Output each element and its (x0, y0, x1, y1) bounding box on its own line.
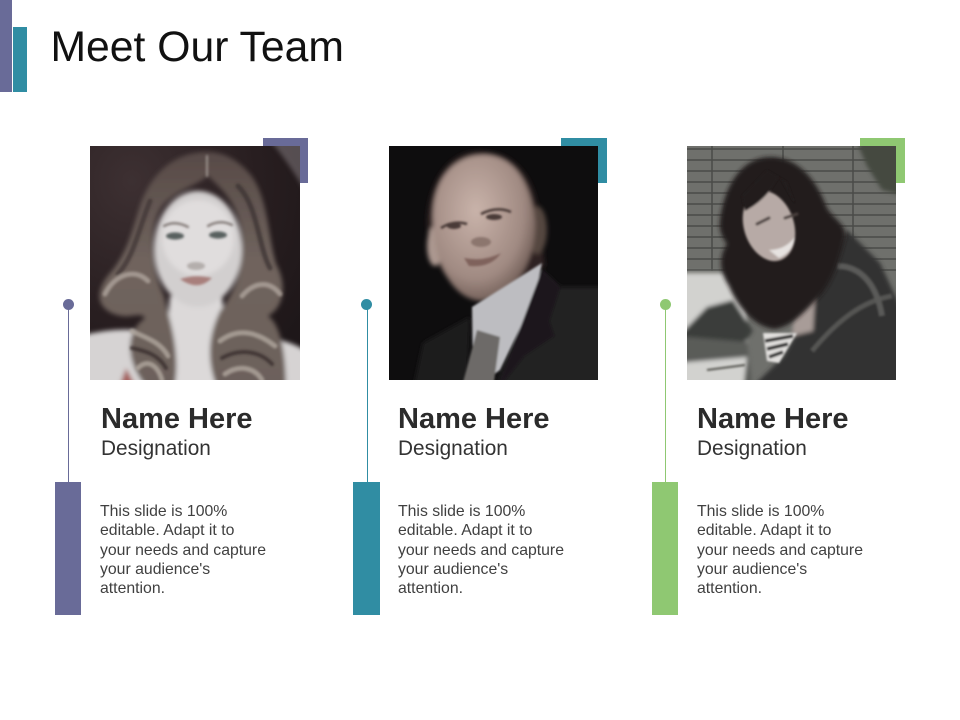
name: Name Here (697, 403, 849, 435)
panel: team member 2 (353, 138, 607, 615)
timeline line (68, 308, 69, 483)
description (100, 503, 266, 597)
description: attention. (398, 580, 463, 597)
description: your audience's (697, 561, 807, 578)
photo corner accent (561, 138, 607, 183)
colour bar (652, 482, 678, 615)
description: This slide is 100% (100, 503, 227, 520)
description: This slide is 100% (697, 503, 824, 520)
photo: man in suit (389, 146, 598, 380)
photo: woman in leather jacket (687, 146, 896, 380)
description: your needs and capture (398, 542, 564, 559)
description: attention. (100, 580, 165, 597)
designation: Designation (697, 437, 807, 460)
designation: Designation (398, 437, 508, 460)
description: your needs and capture (100, 542, 266, 559)
description: attention. (697, 580, 762, 597)
description: your audience's (100, 561, 210, 578)
description: your needs and capture (697, 542, 863, 559)
colour bar (55, 482, 81, 615)
name: Name Here (101, 403, 253, 435)
colour bar (353, 482, 380, 615)
panel: team member 1 (55, 138, 308, 615)
designation: Designation (101, 437, 211, 460)
description: This slide is 100% (398, 503, 525, 520)
name: Name Here (398, 403, 550, 435)
photo corner accent (263, 138, 308, 183)
timeline dot (63, 299, 74, 310)
photo: woman with long curly hair (90, 146, 300, 380)
timeline line (665, 308, 666, 483)
description (398, 503, 564, 597)
title: Meet Our Team (50, 23, 344, 71)
timeline line (367, 308, 368, 483)
timeline dot (361, 299, 372, 310)
description: editable. Adapt it to (398, 522, 532, 539)
description: your audience's (398, 561, 508, 578)
panel: team member 3 (652, 138, 905, 615)
description (697, 503, 863, 597)
timeline dot (660, 299, 671, 310)
title accent bars (0, 0, 27, 92)
description: editable. Adapt it to (697, 522, 831, 539)
photo corner accent (860, 138, 905, 183)
description: editable. Adapt it to (100, 522, 234, 539)
